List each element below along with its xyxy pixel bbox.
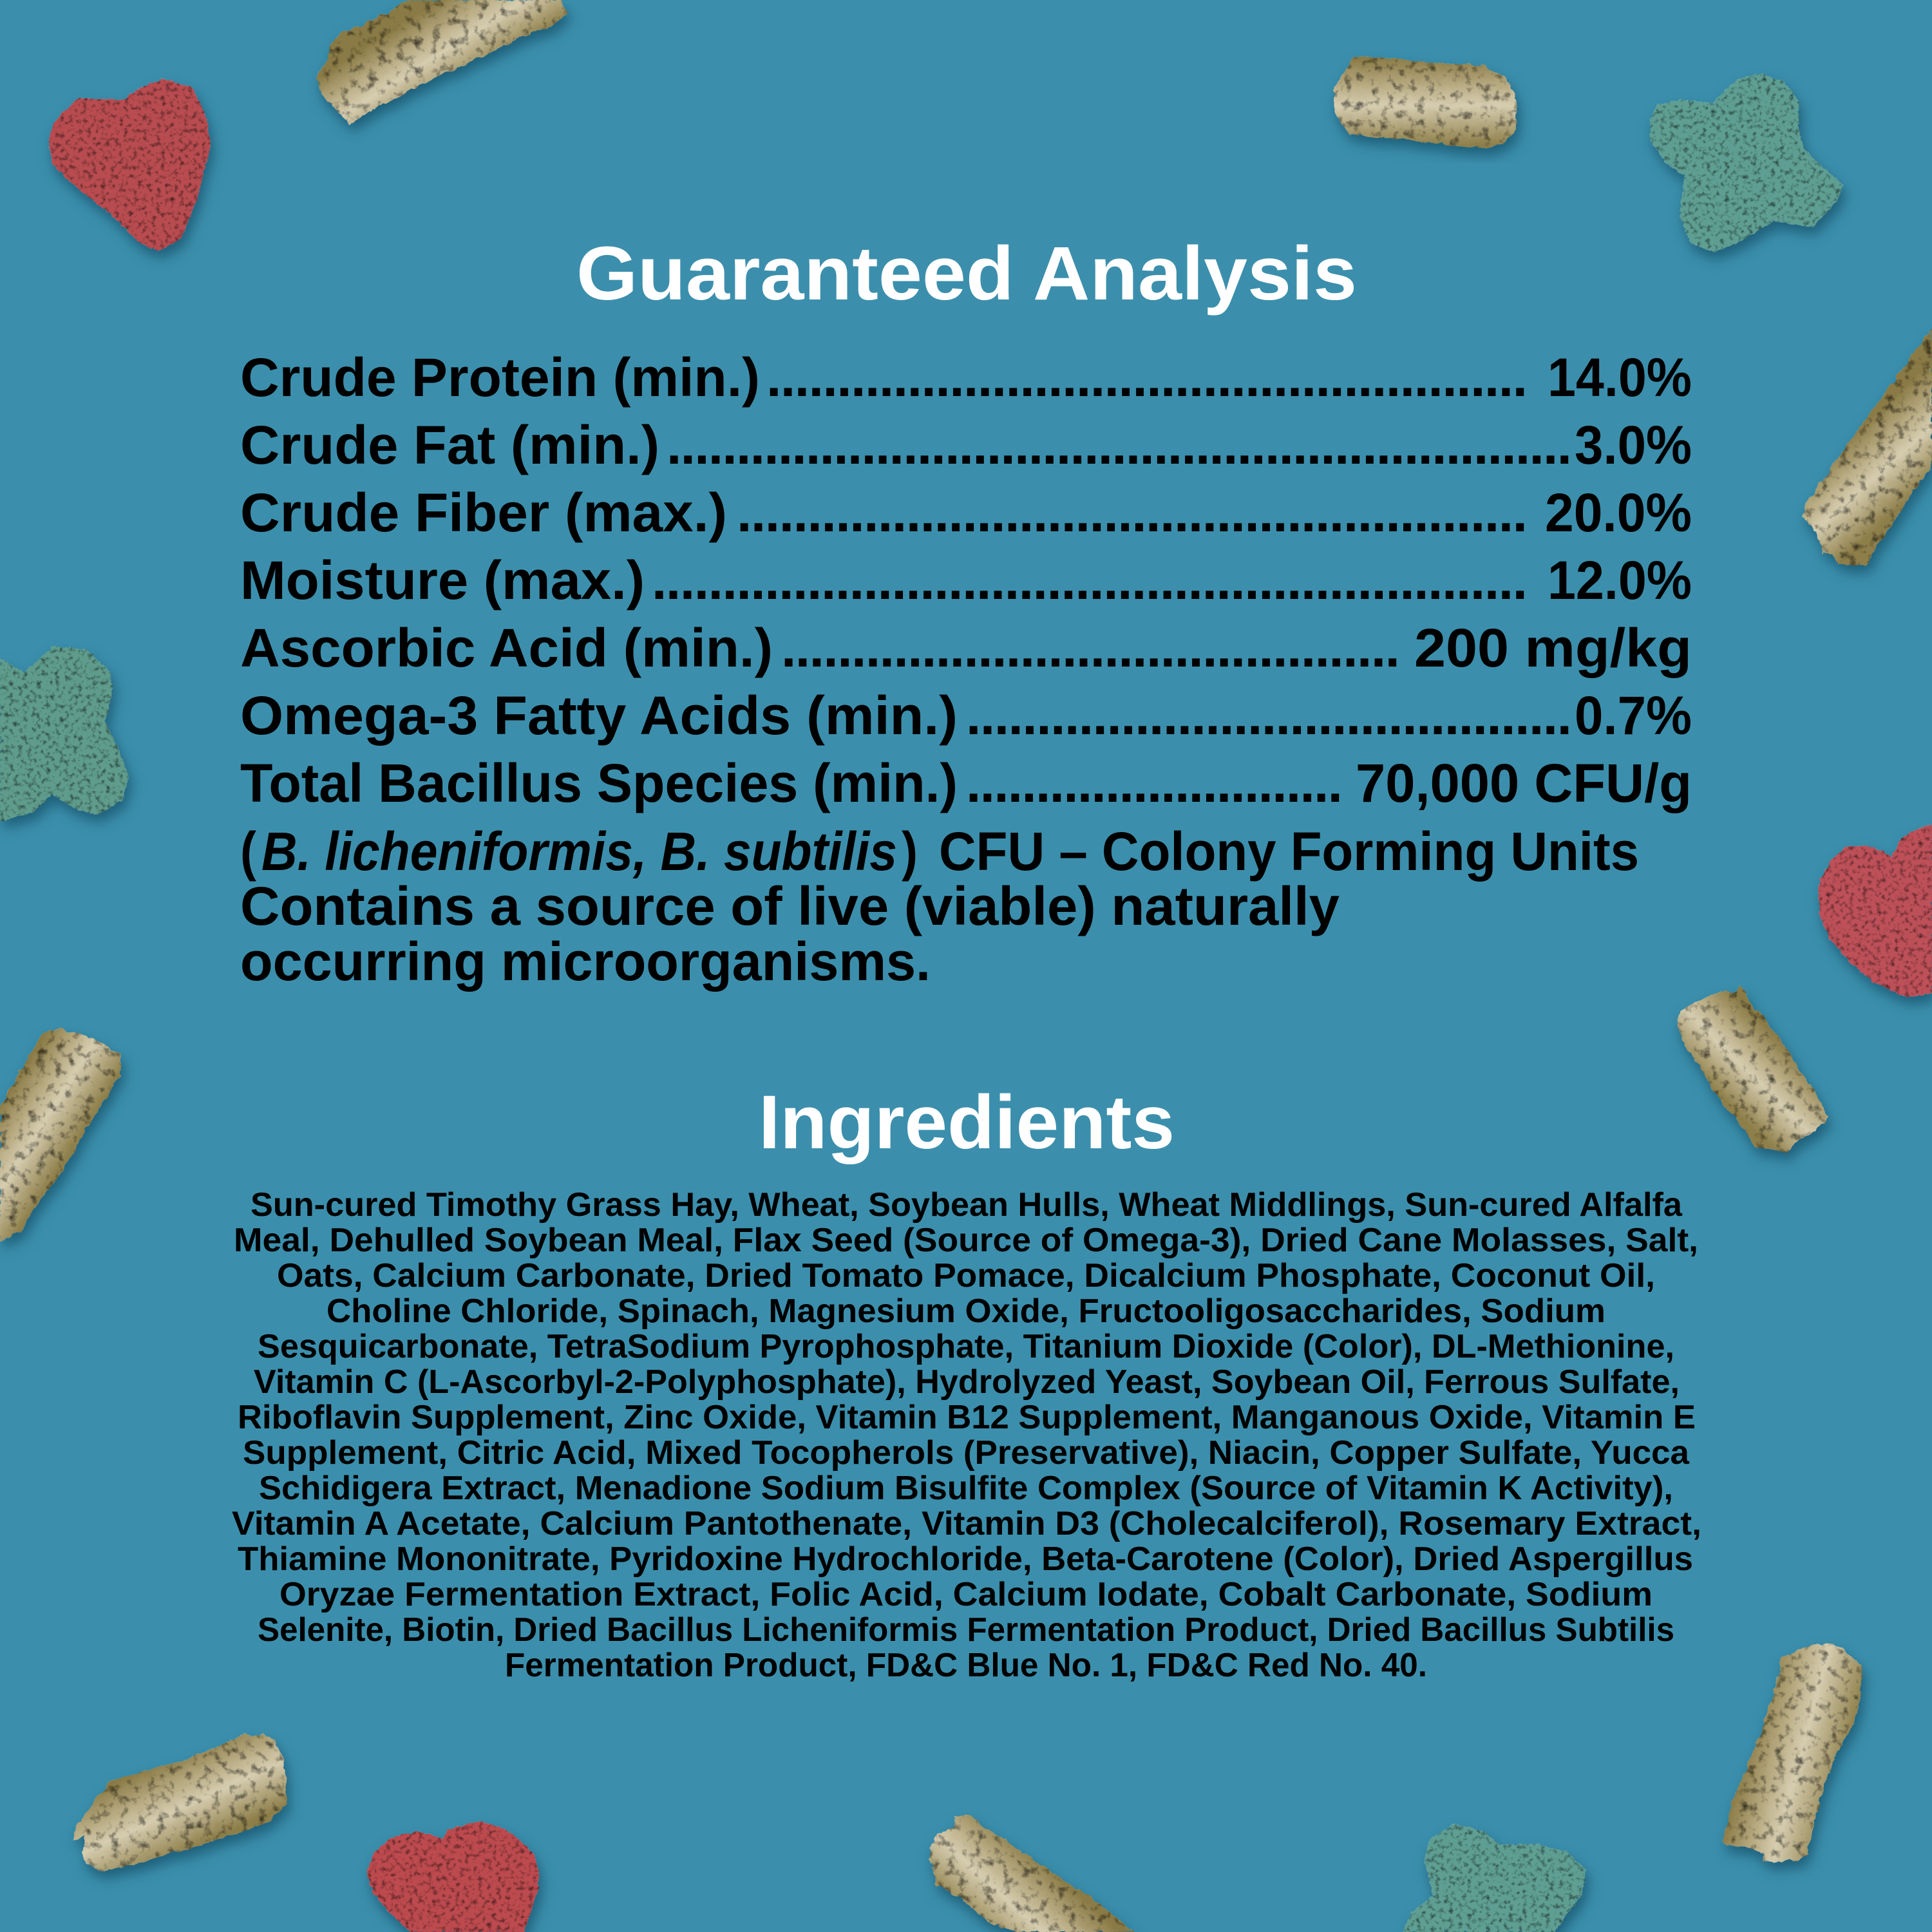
food: pellet left edge bbox=[0, 1028, 121, 1242]
text block: ingredients list: Thiamine Mononitrate, Pyridoxine Hydrochloride, Beta-Carotene (Color), Dried Aspergillus bbox=[238, 1540, 1693, 1578]
text block: ingredients list: Supplement, Citric Acid, Mixed Tocopherols (Preservative), Niacin, Copper Sulfate, Yucca bbox=[243, 1434, 1690, 1472]
note: bacillus species and CFU: CFU – Colony Forming Units bbox=[939, 821, 1639, 882]
food: green cross left edge bbox=[0, 647, 129, 821]
row: total bacillus species bbox=[240, 753, 1692, 813]
food: pellet top right bbox=[1334, 55, 1516, 149]
row: crude fiber: ........................................................ bbox=[737, 482, 1528, 543]
row: omega-3 fatty acids bbox=[240, 685, 1692, 746]
note: bacillus species and CFU: ) bbox=[902, 821, 918, 882]
text block: ingredients list: Schidigera Extract, Menadione Sodium Bisulfite Complex (Source of Vitamin K Activity), bbox=[259, 1470, 1673, 1507]
row: moisture: .............................................................. bbox=[652, 550, 1528, 611]
row: moisture: Moisture (max.) bbox=[240, 550, 645, 611]
heading: Ingredients: Ingredients bbox=[759, 1080, 1175, 1165]
row: moisture: 12.0% bbox=[1548, 550, 1692, 611]
row: crude fat: Crude Fat (min.) bbox=[240, 415, 659, 475]
food: pellet bottom centre bbox=[928, 1816, 1135, 1932]
food: green cross bottom bbox=[1403, 1824, 1586, 1932]
text block: ingredients list: Selenite, Biotin, Dried Bacillus Licheniformis Fermentation Product, Dried Bacillus Subtilis bbox=[258, 1611, 1674, 1649]
food: pellet top left bbox=[316, 0, 567, 124]
row: crude fat bbox=[240, 415, 1692, 475]
text block: ingredients list: Riboflavin Supplement, Zinc Oxide, Vitamin B12 Supplement, Manganous Oxide, Vitamin E bbox=[238, 1399, 1696, 1436]
note: live microorganisms bbox=[240, 876, 1340, 992]
text block: ingredients list: Sesquicarbonate, TetraSodium Pyrophosphate, Titanium Dioxide (Color), DL-Methionine, bbox=[258, 1328, 1674, 1365]
food: green cross top right bbox=[1650, 73, 1844, 252]
text block: ingredients list: Vitamin A Acetate, Calcium Pantothenate, Vitamin D3 (Cholecalciferol), Rosemary Extract, bbox=[232, 1505, 1701, 1542]
text block: ingredients list: Sun-cured Timothy Grass Hay, Wheat, Soybean Hulls, Wheat Middlings, Sun-cured Alfalfa bbox=[251, 1186, 1683, 1224]
note: live microorganisms: Contains a source of live (viable) naturally bbox=[240, 876, 1340, 936]
food: red heart top left bbox=[48, 79, 211, 252]
row: total bacillus species: ........................... bbox=[966, 753, 1343, 813]
row: ascorbic acid: ............................................ bbox=[781, 618, 1400, 678]
row: crude protein: ...................................................... bbox=[766, 347, 1528, 408]
row: crude fat: ................................................................. bbox=[667, 415, 1572, 475]
row: ascorbic acid: 200 mg/kg bbox=[1414, 618, 1692, 678]
food: pellet bottom left bbox=[73, 1734, 287, 1873]
row: omega-3 fatty acids: 0.7% bbox=[1575, 685, 1692, 746]
text block: ingredients list: Choline Chloride, Spinach, Magnesium Oxide, Fructooligosaccharides, Sodium bbox=[327, 1293, 1605, 1330]
text block: ingredients list: Vitamin C (L-Ascorbyl-2-Polyphosphate), Hydrolyzed Yeast, Soybean Oil, Ferrous Sulfate, bbox=[254, 1363, 1680, 1401]
note: bacillus species and CFU: ( bbox=[240, 821, 256, 882]
row: omega-3 fatty acids: ........................................... bbox=[966, 685, 1572, 746]
row: crude protein bbox=[240, 347, 1692, 408]
food: pellet middle right bbox=[1676, 986, 1829, 1153]
panel: guaranteed analysis rows bbox=[240, 347, 1692, 992]
row: total bacillus species: Total Bacillus Species (min.) bbox=[240, 753, 958, 813]
row: crude protein: Crude Protein (min.) bbox=[240, 347, 760, 408]
heading: Guaranteed Analysis: Guaranteed Analysis bbox=[576, 231, 1357, 316]
note: live microorganisms: occurring microorganisms. bbox=[240, 931, 931, 992]
note: bacillus species and CFU bbox=[240, 821, 1639, 882]
row: crude fat: 3.0% bbox=[1575, 415, 1692, 475]
row: crude protein: 14.0% bbox=[1548, 347, 1692, 408]
row: moisture bbox=[240, 550, 1692, 611]
row: crude fiber: 20.0% bbox=[1545, 482, 1692, 543]
food: red heart right edge bbox=[1818, 824, 1932, 998]
row: crude fiber: Crude Fiber (max.) bbox=[240, 482, 727, 543]
row: crude fiber bbox=[240, 482, 1692, 543]
text block: ingredients list: Fermentation Product, FD&C Blue No. 1, FD&C Red No. 40. bbox=[505, 1647, 1427, 1684]
row: omega-3 fatty acids: Omega-3 Fatty Acids (min.) bbox=[240, 685, 958, 746]
row: ascorbic acid bbox=[240, 618, 1692, 678]
food: pellet lower right bbox=[1723, 1643, 1861, 1863]
text block: ingredients list: Oats, Calcium Carbonate, Dried Tomato Pomace, Dicalcium Phosphate, Coconut Oil, bbox=[277, 1257, 1655, 1294]
food: red heart bottom bbox=[366, 1821, 539, 1932]
note: bacillus species and CFU: B. licheniformis, B. subtilis bbox=[261, 821, 897, 882]
row: total bacillus species: 70,000 CFU/g bbox=[1356, 753, 1692, 813]
text block: ingredients list bbox=[232, 1186, 1701, 1684]
food: pellet right edge bbox=[1802, 327, 1932, 565]
text block: ingredients list: Meal, Dehulled Soybean Meal, Flax Seed (Source of Omega-3), Dried Cane Molasses, Salt, bbox=[234, 1222, 1698, 1259]
row: ascorbic acid: Ascorbic Acid (min.) bbox=[240, 618, 773, 678]
text block: ingredients list: Oryzae Fermentation Extract, Folic Acid, Calcium Iodate, Cobalt Carbonate, Sodium bbox=[279, 1576, 1653, 1613]
